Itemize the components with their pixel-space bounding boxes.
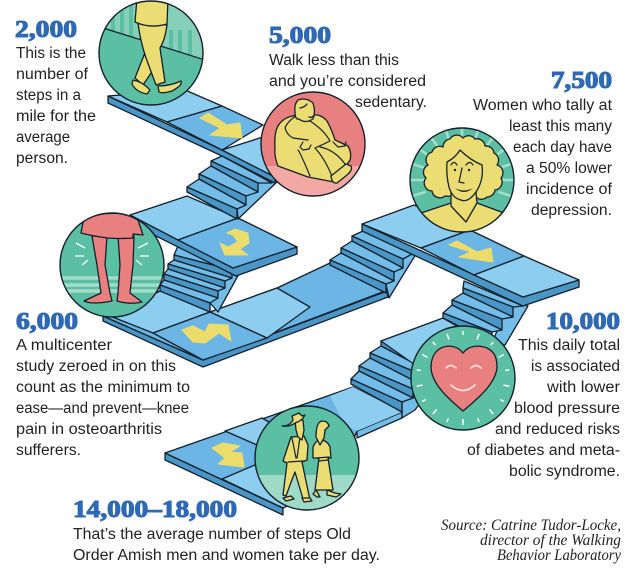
- source credit: Source: Catrine Tudor-Locke,: [441, 517, 621, 534]
- arrow: bottom landing: [212, 443, 244, 467]
- stairs: first flight: [187, 156, 278, 219]
- text block: 6,000: A multicenter: [16, 337, 112, 354]
- arrow: top landing: [200, 113, 242, 138]
- text block: 6,000: count as the minimum to: [16, 379, 190, 396]
- text block: 2,000: steps in a: [16, 87, 81, 104]
- text block: 14,000–18,000: [73, 497, 380, 564]
- icon: smiling heart: [411, 326, 515, 430]
- text block: 10,000: blood pressure: [514, 400, 620, 417]
- text block: 5,000: [269, 23, 427, 111]
- text block: 2,000: person.: [16, 150, 68, 167]
- arrow: upper-right landing: [449, 241, 493, 262]
- icon: smiling woman: [409, 127, 515, 233]
- icon: Amish couple: [255, 406, 359, 515]
- text block: 7,500: Women who tally at: [473, 97, 613, 114]
- platform: third landing with arrow: [103, 263, 388, 367]
- source credit: Behavior Laboratory: [497, 547, 621, 564]
- source credit: director of the Walking: [480, 532, 621, 549]
- stairs: second flight: [160, 246, 240, 312]
- text block: 5,000: and you’re considered: [269, 73, 426, 90]
- platform: middle-right landing: [381, 318, 490, 372]
- text block: 14,000–18,000: 14,000–18,000: [73, 497, 237, 523]
- text block: 6,000: 6,000: [16, 309, 78, 335]
- text block: 5,000: sedentary.: [355, 94, 427, 111]
- text block: 2,000: mile for the: [16, 108, 96, 125]
- text block: 10,000: and reduced risks: [495, 421, 620, 438]
- platform: top landing with arrow: [108, 90, 295, 183]
- stairs: fourth flight: [443, 281, 528, 345]
- text block: 2,000: This is the: [16, 45, 86, 62]
- platform: bottom landing with arrow: [165, 387, 402, 515]
- text block: 7,500: [473, 68, 613, 219]
- text block: 14,000–18,000: That’s the average number of steps Old: [73, 526, 351, 543]
- text block: 6,000: ease—and prevent—knee: [16, 400, 189, 417]
- text block: 10,000: bolic syndrome.: [509, 463, 620, 480]
- platform: second landing with arrow: [130, 196, 297, 276]
- text block: 6,000: [16, 309, 190, 459]
- text block: 2,000: [15, 17, 96, 167]
- text block: 10,000: 10,000: [546, 309, 620, 335]
- text block: 5,000: 5,000: [269, 23, 331, 49]
- text block: 7,500: depression.: [531, 202, 612, 219]
- source credit: [441, 517, 621, 564]
- text block: 14,000–18,000: Order Amish men and women take per day.: [73, 547, 380, 564]
- text block: 5,000: Walk less than this: [269, 52, 399, 69]
- text block: 6,000: pain in osteoarthritis: [16, 421, 162, 438]
- text block: 7,500: incidence of: [526, 181, 613, 198]
- text block: 10,000: with lower: [546, 379, 620, 396]
- icon: legs with knee pain: [55, 213, 170, 317]
- arrow: second landing: [220, 229, 249, 255]
- text block: 2,000: 2,000: [15, 17, 77, 43]
- text block: 7,500: each day have: [513, 139, 612, 156]
- arrow: third landing: [182, 324, 231, 343]
- text block: 6,000: study zeroed in on this: [16, 358, 176, 375]
- text block: 2,000: number of: [16, 66, 89, 83]
- stairs: third flight: [330, 231, 416, 298]
- text block: 2,000: average: [16, 129, 70, 146]
- text block: 6,000: sufferers.: [16, 442, 81, 459]
- platform: upper-right landing with arrow: [362, 205, 579, 306]
- stairs: lowest flight: [351, 341, 430, 418]
- text block: 7,500: 7,500: [551, 68, 612, 94]
- text block: 10,000: of diabetes and meta-: [467, 442, 620, 459]
- text block: 10,000: This daily total: [518, 337, 620, 354]
- icon: seated man in armchair: [260, 91, 366, 197]
- text block: 10,000: [467, 309, 620, 480]
- icon: walking legs: [95, 0, 210, 105]
- text block: 7,500: a 50% lower: [526, 160, 612, 177]
- text block: 7,500: least this many: [509, 118, 612, 135]
- text block: 10,000: is associated: [531, 358, 620, 375]
